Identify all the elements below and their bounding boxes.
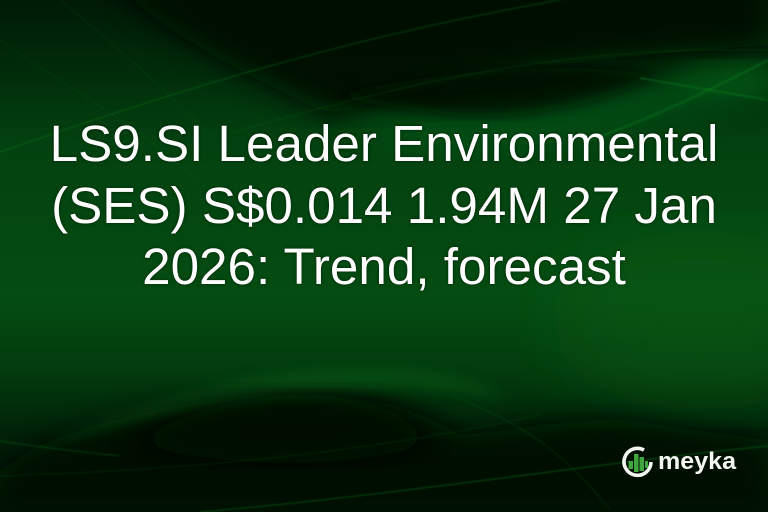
title: 2026: Trend, forecast — [142, 238, 626, 295]
title — [50, 115, 718, 295]
right-hand glows — [550, 230, 768, 410]
logo: meyka — [622, 446, 737, 478]
dark lens under title right — [330, 68, 660, 116]
title: (SES) S$0.014 1.94M 27 Jan — [51, 176, 717, 234]
bottom dark wave — [0, 394, 768, 512]
top dark mass — [110, 0, 768, 115]
wave highlight — [40, 368, 510, 445]
icon: ring with bars — [624, 448, 651, 475]
title: LS9.SI Leader Environmental — [50, 115, 718, 172]
wordmark: meyka — [658, 448, 737, 475]
